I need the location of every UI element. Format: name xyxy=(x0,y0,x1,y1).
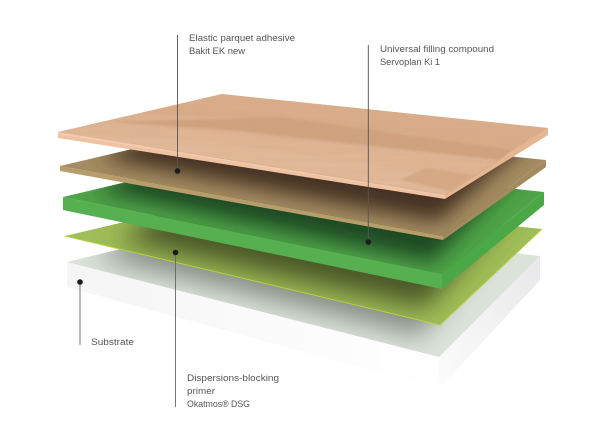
callout: substrate xyxy=(77,279,134,348)
callout: universal filling compound xyxy=(366,44,494,245)
callout: dispersions-blocking primer: Okatmos® DSG xyxy=(187,399,250,410)
callout: elastic parquet adhesive: Bakit EK new xyxy=(189,46,245,57)
layer: filling compound xyxy=(63,180,544,289)
callout: universal filling compound: Servoplan Ki 1 xyxy=(380,57,440,68)
layer: parquet wood xyxy=(50,90,555,200)
layer: substrate xyxy=(67,250,540,358)
callout: elastic parquet adhesive xyxy=(175,33,295,174)
callout: dispersions-blocking primer: Dispersions-blocking xyxy=(187,373,279,384)
layer: primer xyxy=(64,215,542,326)
callout: dispersions-blocking primer: primer xyxy=(187,386,216,397)
wood planks xyxy=(58,94,548,195)
callout: elastic parquet adhesive: Elastic parquet adhesive xyxy=(189,33,295,44)
callout: universal filling compound: Universal filling compound xyxy=(380,44,494,55)
layer: adhesive xyxy=(60,146,546,240)
callout: dispersions-blocking primer xyxy=(173,250,279,410)
callout: substrate: Substrate xyxy=(91,337,134,348)
